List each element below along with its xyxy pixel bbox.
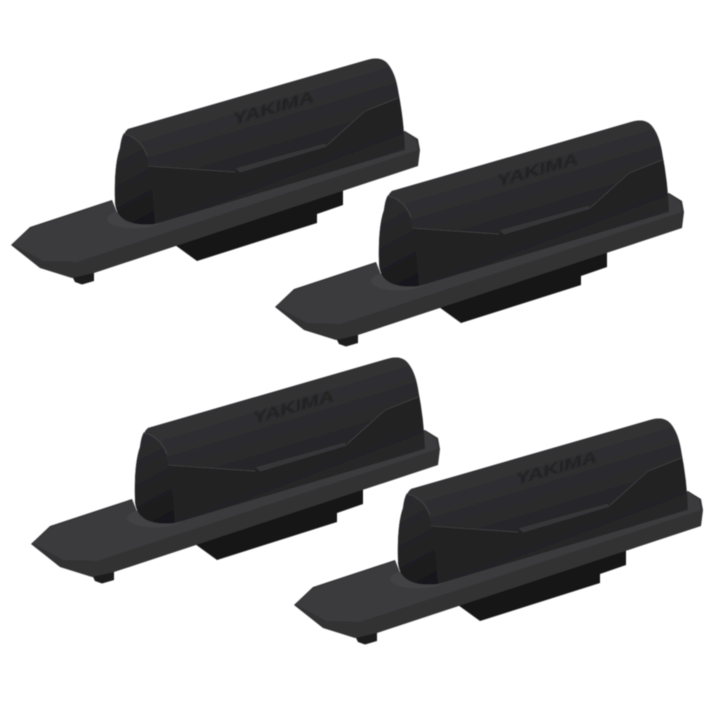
body recess ring (107, 210, 163, 228)
crease line (412, 160, 662, 234)
ridge strip (255, 442, 347, 472)
body (398, 419, 688, 584)
base plate top face (12, 132, 418, 262)
dome edge highlight (144, 433, 167, 454)
logo: YAKIMA (497, 149, 578, 191)
logo: YAKIMA (233, 87, 314, 129)
product 2 (275, 121, 684, 346)
base plate top face (32, 431, 438, 561)
body end cap (379, 195, 419, 286)
body top surface (125, 59, 399, 171)
lower block (458, 550, 626, 621)
base plate (31, 430, 440, 577)
mounting foot (355, 630, 377, 644)
mounting foot (92, 569, 114, 584)
product 3 (31, 358, 440, 584)
dome edge highlight (388, 196, 411, 217)
ridge strip (518, 503, 610, 533)
body top surface (145, 358, 419, 470)
mounting foot (336, 332, 358, 346)
lower block (175, 190, 343, 261)
lower block (439, 252, 607, 323)
body recess ring (127, 508, 183, 528)
base plate top face (276, 194, 682, 324)
crease line (168, 397, 418, 471)
body recess ring (371, 272, 427, 290)
body (115, 59, 405, 224)
logo: YAKIMA (253, 386, 334, 428)
body end cap (115, 133, 155, 224)
ridge strip (499, 205, 591, 235)
ridge strip (235, 143, 327, 173)
crease line (148, 98, 398, 172)
body top surface (389, 121, 663, 233)
base plate top face (295, 492, 701, 622)
logo: YAKIMA (516, 447, 597, 489)
body top surface (408, 419, 682, 531)
dome edge highlight (124, 134, 147, 155)
body recess ring (390, 570, 446, 588)
body (379, 121, 669, 286)
lower block (195, 489, 363, 560)
base plate (294, 491, 703, 638)
base plate (11, 131, 420, 278)
product 4 (294, 419, 703, 644)
base plate (275, 193, 684, 340)
dome edge highlight (407, 494, 430, 515)
product 1 (11, 59, 420, 284)
body (135, 358, 425, 524)
mounting foot (72, 270, 94, 284)
body end cap (398, 493, 438, 584)
body end cap (135, 432, 175, 524)
crease line (431, 458, 681, 532)
